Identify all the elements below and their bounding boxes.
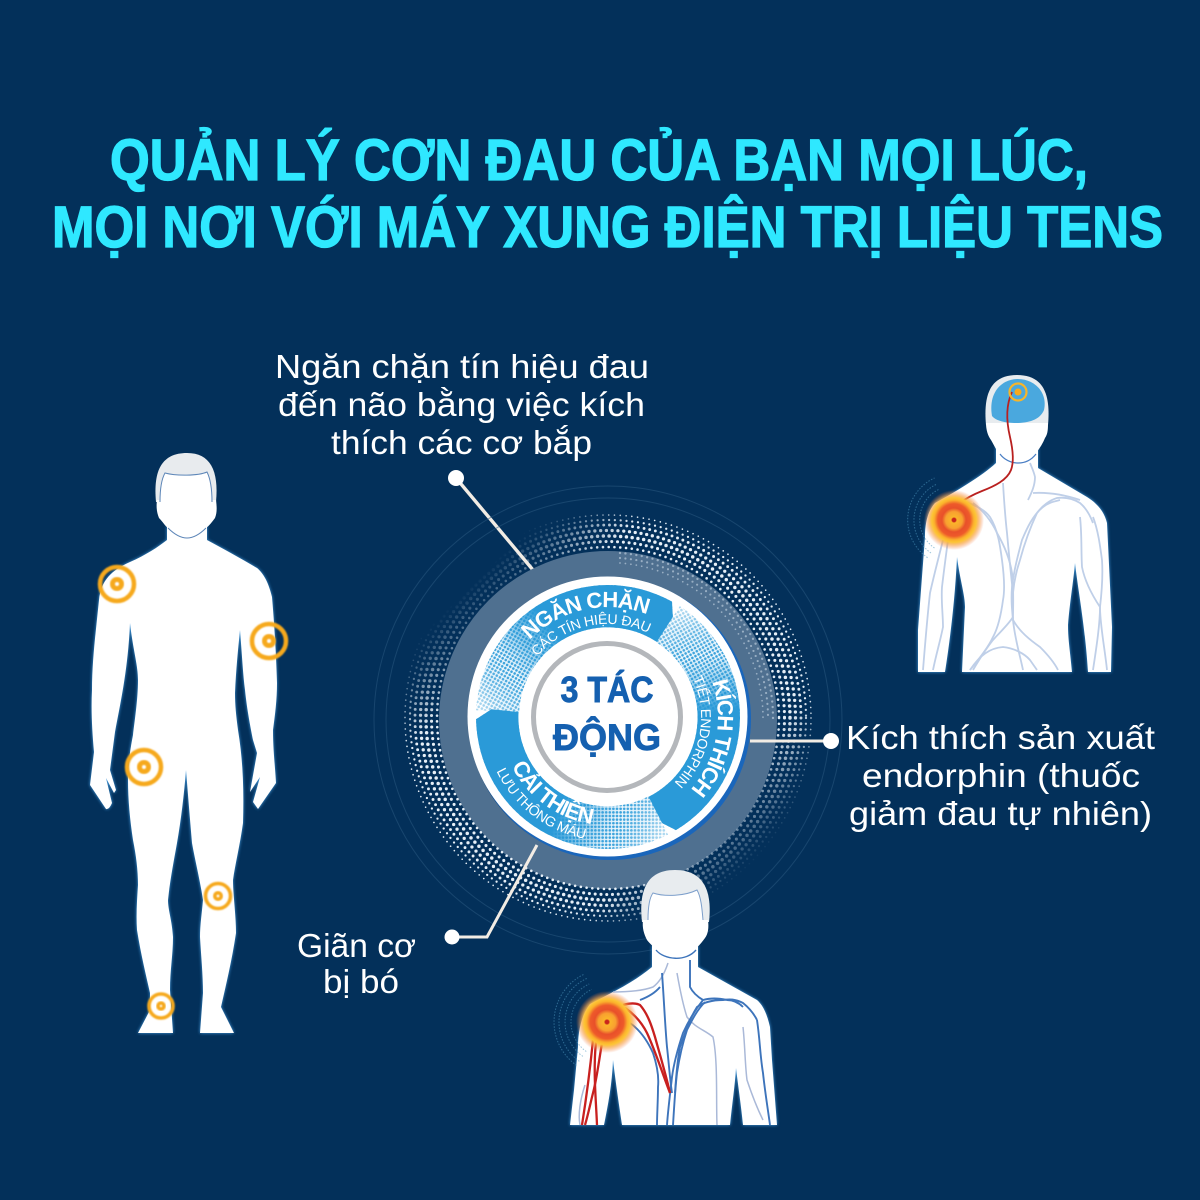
face [643,890,708,957]
arteries [582,1004,670,1125]
text block: block pain signals: đến não bằng việc kích [278,386,645,423]
pain point: ankle [149,994,173,1018]
impact wheel [374,486,842,954]
jaw line [1000,454,1036,463]
hair [155,453,217,502]
centre medallion [524,633,692,801]
face [157,472,217,538]
text block: block pain signals: thích các cơ bắp [331,424,592,461]
text block: endorphin: giảm đau tự nhiên) [849,795,1152,832]
body silhouette [918,445,1112,672]
body silhouette [570,945,777,1125]
waves [554,974,592,1065]
dotted rings [405,515,811,921]
text block: muscle relaxation [297,927,416,1000]
leader line: bottom [444,845,537,944]
pain point: arm [252,624,286,658]
sector labels: LƯU THÔNG MÁU [496,768,586,838]
text block: block pain signals: Ngăn chặn tín hiệu đau [275,348,649,385]
text block: endorphin [846,719,1155,832]
sector: block [476,585,673,712]
leader line: top [448,470,533,570]
figure: full body with pain points [90,453,286,1033]
sector: circulation [461,663,670,897]
face [986,423,1048,464]
nerves [923,463,1107,670]
dotted band overlay [620,553,773,718]
title: QUẢN LÝ CƠN ĐAU CỦA BẠN MỌI LÚC, [110,128,1088,193]
hairline and jaw [160,472,212,538]
text block: endorphin: endorphin (thuốc [862,757,1140,794]
waves [908,478,940,558]
faint veins [579,963,763,1125]
centre medallion: 3 TÁC [560,669,654,710]
brain target [1010,384,1026,400]
pain point: hip [127,750,161,784]
hair [985,375,1049,425]
hair [641,870,710,922]
pain point: shoulder [100,567,134,601]
text block: muscle relaxation: Giãn cơ [297,927,416,964]
sector labels: TIẾT ENDORPHIN [674,674,712,788]
figure: upper body nerve signal to brain [908,375,1112,672]
body silhouette [90,525,277,1033]
leader line: right [750,733,839,749]
shoulder pain spot [924,490,984,550]
sector labels [496,588,736,838]
faint outer rings [374,486,842,954]
pain point: knee [206,884,230,908]
shoulder pain spot [576,991,638,1053]
translucent band [454,566,762,874]
text block: endorphin: Kích thích sản xuất [846,719,1155,756]
text block: block pain signals [275,348,649,461]
centre medallion: ĐỘNG [553,716,661,758]
sector labels: CẢI THIỆN [514,762,594,824]
sector labels: NGĂN CHẶN [520,588,650,639]
text block: muscle relaxation: bị bó [323,963,399,1000]
brain [991,379,1045,423]
sector: endorphin [580,605,788,839]
hairline and jaw [648,890,703,958]
red signal line [960,392,1013,503]
title [52,128,1163,260]
wheel rim [469,578,751,860]
sector labels: CÁC TÍN HIỆU ĐAU [532,612,652,654]
veins [630,960,770,1125]
sector labels: KÍCH THÍCH [692,679,736,798]
figure: upper body circulation [554,870,777,1125]
